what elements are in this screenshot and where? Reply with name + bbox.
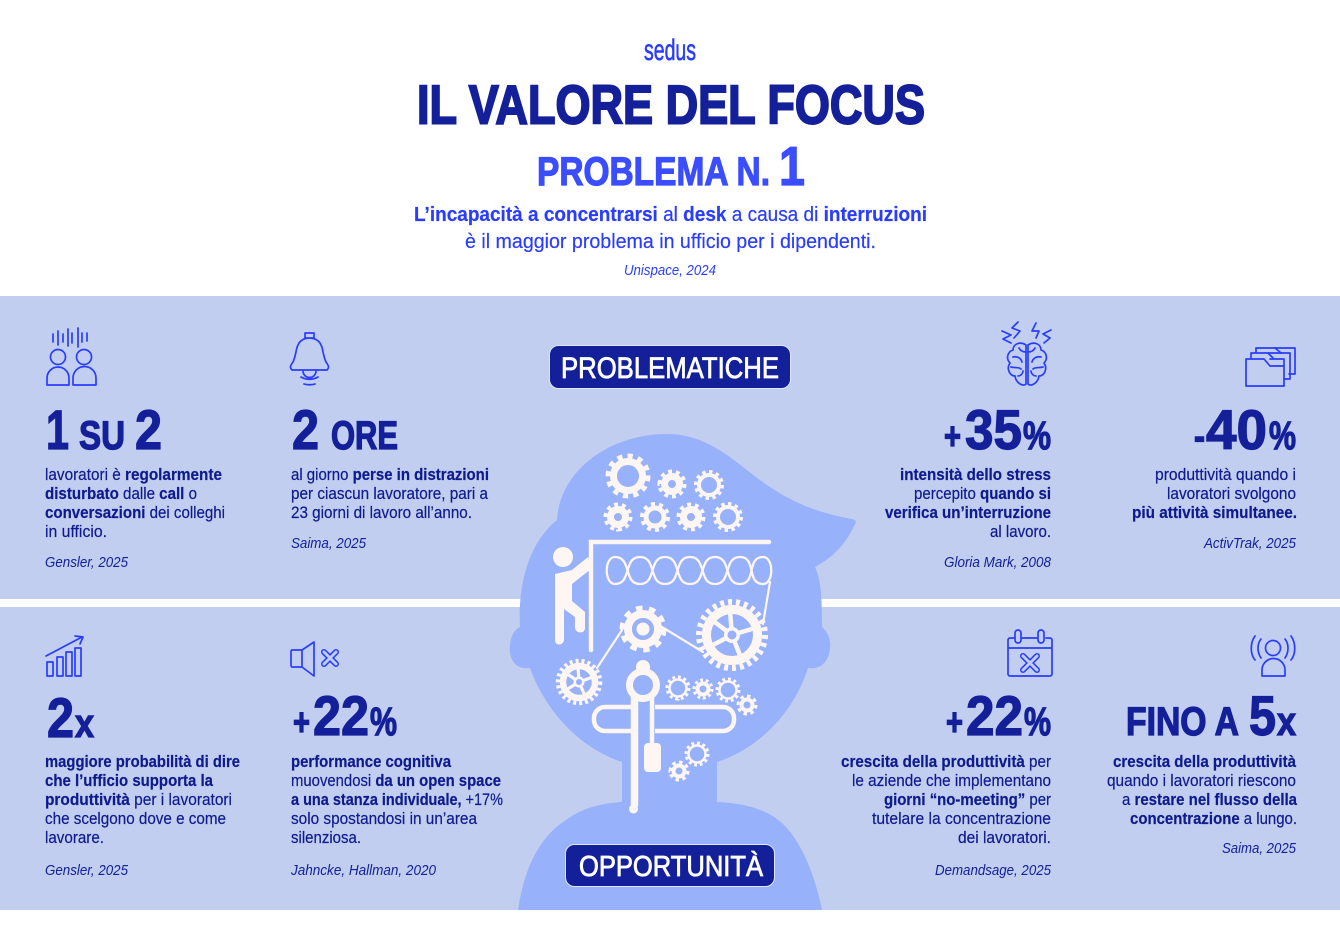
card: 1 su 2 <box>45 328 225 571</box>
source: Gensler, 2025 <box>45 863 129 879</box>
text block: crescita della produttività per <box>841 752 1051 771</box>
text block: crescita della produttività <box>1113 752 1296 771</box>
intro text: L’incapacità a concentrarsi al desk a causa di interruzioni <box>414 204 927 226</box>
source: Gensler, 2025 <box>45 555 129 571</box>
text block: maggiore probabilità di dire <box>45 752 240 771</box>
source: Saima, 2025 <box>1222 841 1297 857</box>
card: -40% <box>1132 348 1297 552</box>
stat: + <box>946 702 963 744</box>
icon: stressed brain <box>1002 322 1051 385</box>
subtitle: problema n. 1: 1 <box>779 135 805 197</box>
card: 2x <box>45 636 240 879</box>
gears cluster: small <box>667 677 756 780</box>
text block: dei lavoratori. <box>958 828 1051 847</box>
lever mechanism <box>594 660 734 814</box>
text block: muovendosi da un open space <box>291 771 501 790</box>
card: +22% cognitive <box>290 642 503 879</box>
icon: two people with sound <box>47 328 96 385</box>
belts <box>597 582 770 668</box>
stat: 5 <box>1249 684 1276 747</box>
text block: lavoratori è regolarmente <box>45 465 222 484</box>
coil <box>607 557 771 584</box>
text block: più attività simultanee. <box>1132 503 1297 522</box>
text block: che l’ufficio supporta la <box>45 771 213 790</box>
stat <box>944 398 1051 461</box>
text block <box>841 752 1051 847</box>
stat: % <box>1269 414 1296 458</box>
text block <box>885 465 1051 541</box>
stat <box>1194 398 1296 461</box>
badge: problematiche <box>550 346 790 388</box>
text block: produttività quando i <box>1155 465 1296 484</box>
stat: 1 <box>46 398 69 461</box>
text block: lavoratori svolgono <box>1167 484 1296 503</box>
source: Demandsage, 2025 <box>935 863 1052 879</box>
icon: muted speaker <box>291 642 336 676</box>
logo: sedus: sedus <box>644 34 696 67</box>
panel: problematiche band <box>0 296 1340 599</box>
icon: person with signal waves <box>1251 636 1295 676</box>
intro text <box>414 204 927 253</box>
text block: le aziende che implementano <box>852 771 1051 790</box>
text block: concentrazione a lungo. <box>1130 809 1297 828</box>
stat: x <box>1277 700 1296 744</box>
card: +22% productivity <box>841 630 1052 879</box>
text block: al giorno perse in distrazioni <box>291 465 489 484</box>
text block: al lavoro. <box>990 522 1051 541</box>
stat: 35 <box>965 398 1022 461</box>
head silhouette <box>510 434 856 910</box>
text block: intensità dello stress <box>900 465 1051 484</box>
title: IL VALORE DEL FOCUS <box>417 74 925 136</box>
panel: opportunità band <box>0 607 1340 910</box>
badge: opportunità: OPPORTUNITÀ <box>579 850 764 883</box>
text block <box>291 465 489 522</box>
text block: lavorare. <box>45 828 104 847</box>
stat <box>47 686 94 749</box>
text block: verifica un’interruzione <box>885 503 1051 522</box>
source: Gloria Mark, 2008 <box>944 555 1051 571</box>
text block <box>291 752 503 847</box>
badge: problematiche: PROBLEMATICHE <box>561 352 779 385</box>
medium gear <box>622 608 664 650</box>
source: ActivTrak, 2025 <box>1203 536 1297 552</box>
stat: 2 <box>292 398 319 461</box>
stat: SU <box>79 414 125 458</box>
stat: 2 <box>135 398 162 461</box>
stat: 22 <box>313 684 369 747</box>
stat: 2 <box>47 686 74 749</box>
subtitle: problema n. 1: PROBLEMA N. <box>537 150 770 194</box>
stat: 40 <box>1206 398 1267 461</box>
stat: 22 <box>966 684 1023 747</box>
stat: + <box>944 416 961 458</box>
illustration: head silhouette with mechanisms <box>510 434 856 910</box>
text block: disturbato dalle call o <box>45 484 197 503</box>
intro text: è il maggior problema in ufficio per i dipendenti. <box>465 231 876 253</box>
text block: tutelare la concentrazione <box>872 809 1051 828</box>
stat <box>46 398 162 461</box>
stat <box>1126 684 1296 747</box>
source: Saima, 2025 <box>291 536 367 552</box>
card: 2 ore <box>290 333 489 552</box>
text block <box>1132 465 1297 522</box>
stat: x <box>75 702 94 746</box>
text block: in ufficio. <box>45 522 107 541</box>
stat <box>293 684 397 747</box>
text block: produttività per i lavoratori <box>45 790 232 809</box>
text block: giorni “no-meeting” per <box>884 790 1051 809</box>
stat: - <box>1194 416 1205 458</box>
card: +35% <box>885 322 1051 571</box>
text block: percepito quando si <box>914 484 1051 503</box>
source: unispace: Unispace, 2024 <box>624 263 716 279</box>
text block: conversazioni dei colleghi <box>45 503 225 522</box>
gears cluster: top <box>606 456 741 530</box>
icon: stacked folders <box>1246 348 1295 386</box>
stat: % <box>370 700 397 744</box>
icon: bell <box>290 333 329 385</box>
small spoked gear <box>558 661 600 703</box>
text block <box>45 465 225 541</box>
text block: quando i lavoratori riescono <box>1107 771 1296 790</box>
text block: performance cognitiva <box>291 752 451 771</box>
stat <box>292 398 398 461</box>
text block: a restare nel flusso della <box>1122 790 1297 809</box>
text block <box>1107 752 1297 828</box>
source: Jahncke, Hallman, 2020 <box>290 863 436 879</box>
large gear <box>699 602 765 668</box>
badge: opportunità <box>566 844 774 886</box>
frame and climbing figure <box>553 542 769 650</box>
stat: ORE <box>331 414 398 458</box>
stat: FINO A <box>1126 700 1239 744</box>
text block: a una stanza individuale, +17% <box>291 790 503 809</box>
subtitle: problema n. 1 <box>537 135 805 197</box>
text block: per ciascun lavoratore, pari a <box>291 484 488 503</box>
card: fino a 5x <box>1107 636 1297 857</box>
icon: growth chart <box>46 636 83 676</box>
stat <box>946 684 1051 747</box>
icon: calendar with x <box>1008 630 1052 676</box>
stat: % <box>1023 414 1051 458</box>
stat: + <box>293 702 310 744</box>
text block <box>45 752 240 847</box>
text block: 23 giorni di lavoro all’anno. <box>291 503 472 522</box>
text block: solo spostandosi in un’area <box>291 809 477 828</box>
stat: % <box>1024 700 1051 744</box>
text block: che scelgono dove e come <box>45 809 226 828</box>
text block: silenziosa. <box>291 828 361 847</box>
